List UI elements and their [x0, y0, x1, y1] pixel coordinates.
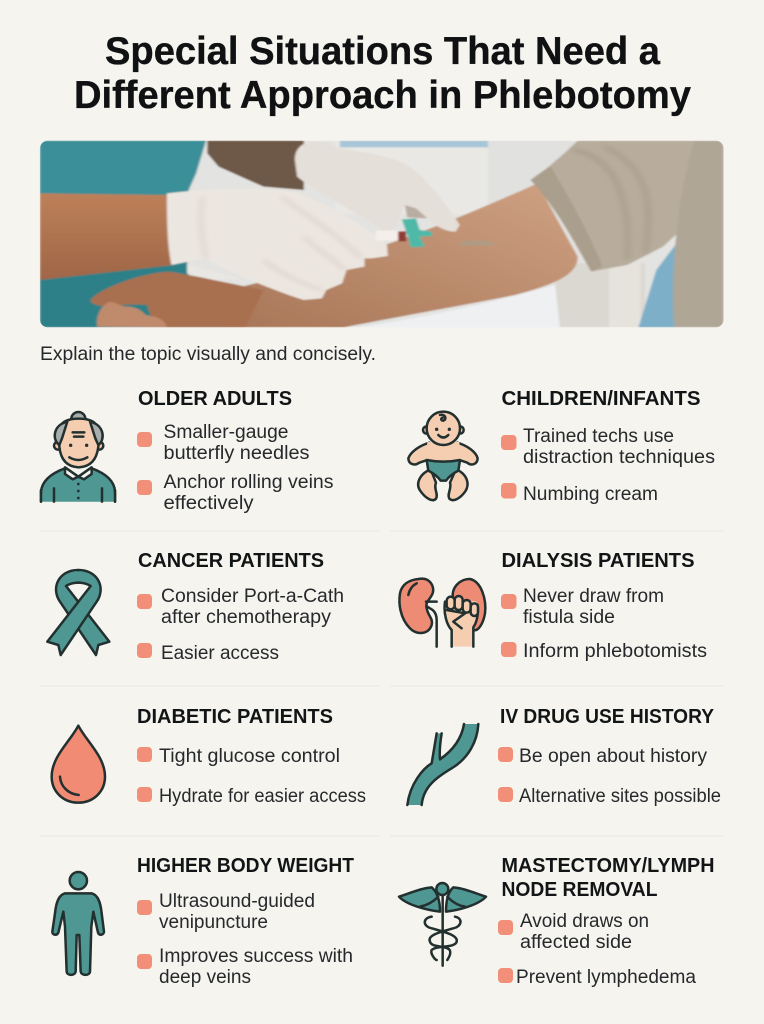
bullet list — [137, 891, 353, 988]
heading: IV DRUG USE HISTORY — [500, 706, 715, 728]
heading: MASTECTOMY/LYMPH — [502, 855, 714, 877]
bullet list: distraction techniques — [523, 447, 715, 468]
title: Special Situations That Need a — [105, 30, 660, 73]
bullet list: Improves success with — [159, 946, 353, 967]
bullet list: effectively — [164, 493, 254, 514]
panel: mastectomy/lymph node removal — [399, 855, 714, 988]
bullet list — [498, 746, 721, 807]
heading: HIGHER BODY WEIGHT — [137, 855, 354, 877]
bullet list: Be open about history — [519, 746, 708, 767]
bullet list — [498, 911, 696, 988]
bullet list — [137, 746, 366, 807]
heading — [502, 855, 714, 901]
bullet list: Smaller-gauge — [164, 422, 288, 443]
icon: blood drop — [52, 726, 105, 803]
bullet list: after chemotherapy — [161, 607, 332, 628]
icon: kidneys and fist — [399, 579, 485, 647]
bullet list — [137, 422, 334, 514]
heading: CHILDREN/INFANTS — [502, 388, 700, 410]
title: Different Approach in Phlebotomy — [74, 74, 691, 117]
panel: older adults — [41, 388, 334, 514]
bullet list: Tight glucose control — [159, 746, 340, 767]
photo: gloved hands drawing blood from a forearm — [40, 141, 724, 327]
bullet list: Ultrasound-guided — [159, 891, 315, 912]
icon: caduceus — [399, 883, 486, 966]
icon: awareness ribbon — [47, 570, 109, 655]
icon: branching vein — [407, 724, 478, 805]
icon: person — [52, 872, 104, 975]
bullet list: deep veins — [159, 967, 251, 988]
bullet list: affected side — [520, 932, 632, 953]
bullet list: Avoid draws on — [520, 911, 649, 932]
panel: higher body weight — [52, 855, 354, 988]
panel: diabetic patients — [52, 706, 366, 807]
intro text: Explain the topic visually and concisely. — [40, 344, 376, 365]
panel: dialysis patients — [399, 550, 707, 662]
bullet list: Consider Port-a-Cath — [161, 586, 344, 607]
heading: CANCER PATIENTS — [138, 550, 324, 572]
heading: DIABETIC PATIENTS — [137, 706, 333, 728]
bullet list: fistula side — [523, 607, 615, 628]
heading: NODE REMOVAL — [502, 879, 658, 901]
title — [74, 30, 691, 117]
bullet list — [501, 586, 707, 662]
panel: iv drug use history — [407, 706, 721, 807]
bullet list: venipuncture — [159, 912, 268, 933]
bullet list: Never draw from — [523, 586, 664, 607]
heading: OLDER ADULTS — [138, 388, 292, 410]
bullet list: Alternative sites possible — [519, 786, 721, 807]
panel: cancer patients — [47, 550, 344, 664]
bullet list: Numbing cream — [523, 484, 658, 505]
icon: baby — [408, 412, 478, 500]
bullet list: Prevent lymphedema — [516, 967, 696, 988]
bullet list: butterfly needles — [164, 443, 310, 464]
bullet list: Anchor rolling veins — [164, 472, 334, 493]
bullet list: Trained techs use — [523, 426, 674, 447]
bullet list — [501, 426, 715, 505]
bullet list — [137, 586, 344, 664]
heading: DIALYSIS PATIENTS — [502, 550, 694, 572]
icon: older man — [41, 412, 115, 502]
bullet list: Easier access — [161, 643, 279, 664]
bullet list: Inform phlebotomists — [523, 641, 707, 662]
panel: children/infants — [408, 388, 715, 505]
bullet list: Hydrate for easier access — [159, 786, 366, 807]
